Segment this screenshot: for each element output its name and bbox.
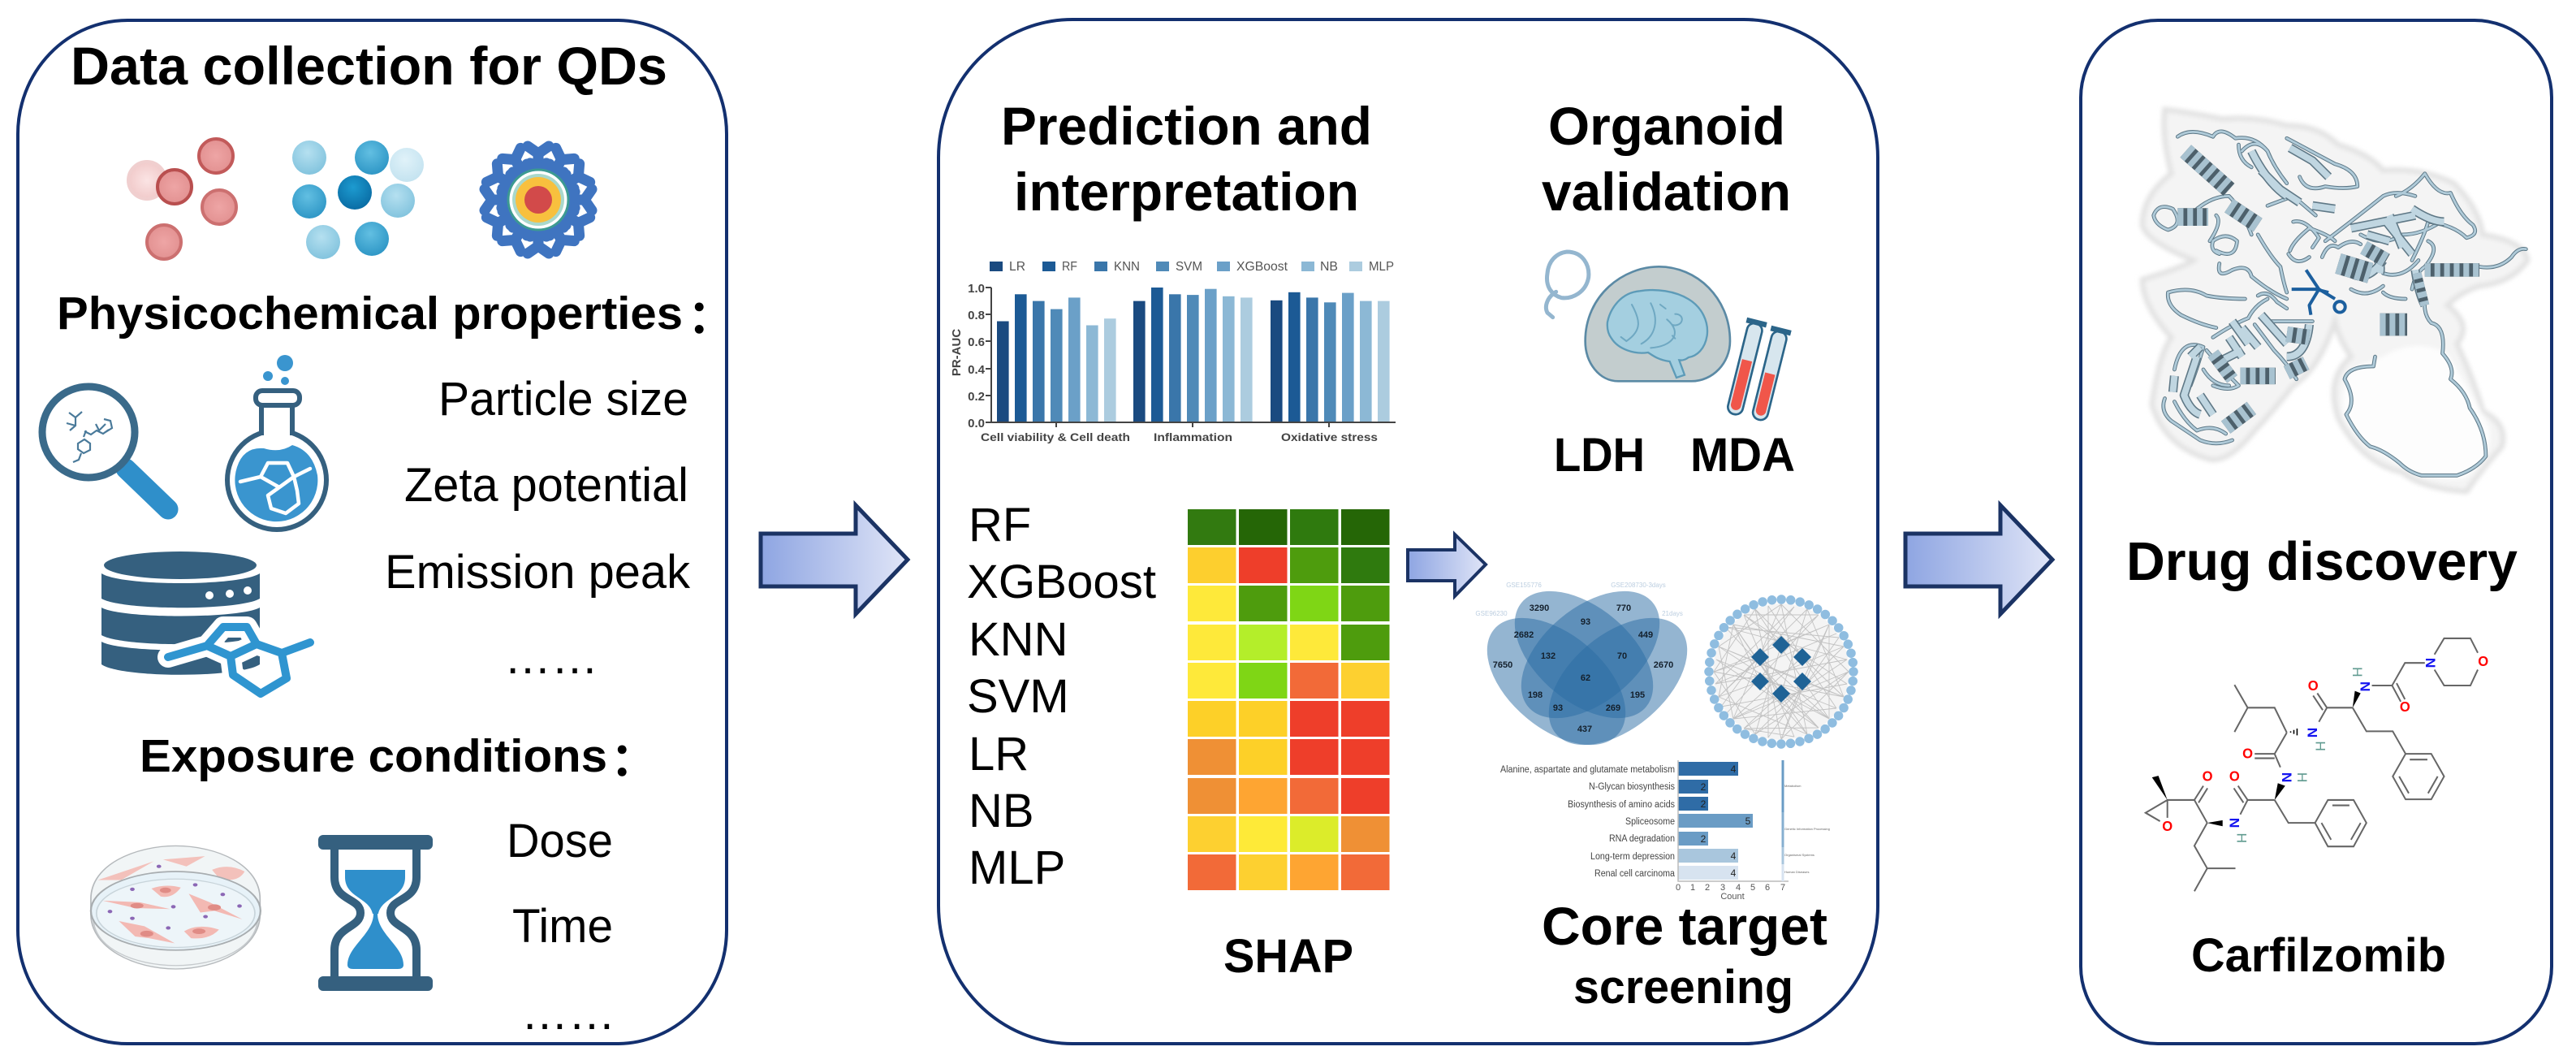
structure: carfilzomib molecule: O (2242, 746, 2253, 762)
legend: KNN (1114, 260, 1140, 274)
category strip: Organismal Systems (1784, 853, 1814, 857)
chart: four-set Venn diagram: 21days (1662, 610, 1683, 617)
bar values: 4 (1731, 867, 1737, 879)
icon: brain organoid and test tubes (1546, 252, 1792, 422)
structure: carfilzomib molecule: H (2312, 741, 2328, 751)
title: core target screening (1542, 896, 1827, 1014)
labels: LDH and MDA: MDA (1690, 429, 1795, 482)
legend: LR (1009, 260, 1025, 274)
pathway names: Biosynthesis of amino acids (1568, 800, 1675, 810)
structure: carfilzomib molecule: N (2423, 658, 2438, 668)
title: organoid validation: validation (1542, 162, 1791, 222)
arrow: screening to drug discovery (1905, 505, 2052, 614)
bar values: 2 (1701, 798, 1707, 810)
chart: four-set Venn diagram: 3290 (1530, 603, 1549, 613)
pathway names: Alanine, aspartate and glutamate metabolism (1500, 765, 1675, 775)
axis labels: Oxidative stress (1281, 430, 1378, 443)
chart: four-set Venn diagram: 93 (1553, 703, 1563, 713)
bar values: 2 (1701, 781, 1707, 793)
axis labels: 1.0 (968, 282, 985, 296)
structure: carfilzomib molecule: H (2234, 833, 2249, 843)
icon: blue quantum dots (292, 141, 424, 259)
structure: carfilzomib molecule: O (2478, 654, 2488, 669)
title: prediction and interpretation: Prediction and (1001, 96, 1372, 156)
list: machine learning models: LR (969, 728, 1029, 781)
structure: carfilzomib molecule: N (2279, 772, 2293, 782)
structure: carfilzomib molecule: H (2349, 667, 2364, 677)
icon: hourglass (318, 835, 433, 991)
chart: KEGG enrichment bar chart: 5 (1750, 883, 1755, 893)
chart: four-set Venn diagram: 93 (1581, 617, 1590, 627)
title: prediction and interpretation: interpretation (1014, 162, 1359, 222)
chart: four-set Venn diagram: 195 (1630, 690, 1645, 700)
pathway names: N-Glycan biosynthesis (1589, 782, 1675, 792)
category strip: Human Diseases (1784, 870, 1809, 874)
panel: data collection for QDs (18, 20, 734, 1044)
list: physicochemical properties: …… (504, 631, 598, 684)
bar values: 4 (1731, 763, 1737, 775)
chart: four-set Venn diagram: 62 (1581, 673, 1590, 683)
legend: MLP (1369, 260, 1394, 274)
chart: KEGG enrichment bar chart: 6 (1765, 883, 1770, 893)
pathway names: Renal cell carcinoma (1594, 869, 1676, 879)
chart: four-set Venn diagram (1464, 566, 1711, 770)
icon: database with molecule (101, 551, 310, 694)
legend: XGBoost (1236, 260, 1288, 274)
list: exposure conditions: …… (521, 987, 615, 1040)
icon: red quantum dots (128, 139, 236, 259)
chart: four-set Venn diagram: 2682 (1514, 630, 1534, 640)
title: drug discovery: Drug discovery (2126, 531, 2518, 592)
chart: KEGG enrichment bar chart: 0 (1676, 883, 1681, 893)
structure: carfilzomib molecule: O (2308, 677, 2319, 694)
count axis (1678, 760, 1789, 881)
chart: SHAP heatmap (1188, 509, 1390, 890)
chart: KEGG enrichment bar chart (1500, 760, 1830, 902)
axis labels: 0.0 (968, 417, 985, 430)
chart: four-set Venn diagram: 7650 (1493, 660, 1512, 670)
axis labels: 0.6 (968, 335, 985, 349)
chart: four-set Venn diagram: 437 (1577, 724, 1592, 734)
chart: four-set Venn diagram: 198 (1528, 690, 1543, 700)
structure: carfilzomib molecule: N (2305, 728, 2319, 737)
list: exposure conditions (507, 815, 615, 1040)
labels: LDH and MDA: LDH (1554, 429, 1645, 482)
bars: cell viability and cell death (997, 294, 1116, 422)
chart: four-set Venn diagram: 269 (1606, 703, 1620, 713)
chart: KEGG enrichment bar chart: 1 (1690, 883, 1695, 893)
title: prediction and interpretation (1001, 96, 1372, 222)
axis labels: 0.2 (968, 390, 985, 404)
icon: petri dish with cells (91, 846, 261, 969)
legend: SVM (1176, 260, 1202, 274)
bars (1678, 762, 1753, 880)
chart: KEGG enrichment bar chart: 4 (1736, 883, 1741, 893)
title: organoid validation (1542, 96, 1791, 222)
bars: inflammation (1133, 288, 1253, 422)
axis labels (950, 282, 1378, 443)
pathway names: Long-term depression (1590, 852, 1675, 862)
chart: four-set Venn diagram: 449 (1638, 630, 1653, 640)
list: machine learning models: NB (969, 785, 1034, 837)
chart: four-set Venn diagram: GSE96230 (1475, 610, 1508, 617)
bar values (1701, 763, 1751, 879)
icon: magnifying glass (42, 387, 168, 509)
arrow: SHAP to core target (1408, 534, 1486, 596)
structure: carfilzomib molecule (2146, 638, 2488, 891)
pathway names: Spliceosome (1625, 817, 1675, 827)
structure: carfilzomib molecule: N (2358, 681, 2372, 692)
list: physicochemical properties: Particle size (438, 373, 688, 426)
structure: carfilzomib molecule: O (2203, 768, 2213, 785)
list: physicochemical properties: Emission peak (385, 546, 691, 599)
chart: four-set Venn diagram: 132 (1541, 651, 1556, 661)
pathway names (1500, 765, 1676, 879)
chart: KEGG enrichment bar chart: 7 (1780, 883, 1785, 893)
axis labels: Cell viability & Cell death (981, 430, 1130, 443)
chart: protein interaction network (1709, 599, 1853, 744)
axis labels: 0.4 (968, 363, 986, 377)
bar values: 4 (1731, 850, 1737, 862)
list: machine learning models: XGBoost (967, 556, 1156, 608)
panel: drug discovery (2081, 20, 2552, 1044)
heading: exposure conditions: Exposure conditions (140, 730, 607, 782)
structure: carfilzomib molecule: O (2162, 819, 2173, 834)
heading: physicochemical properties: ： (688, 292, 734, 344)
title: data collection: Data collection for QDs (71, 36, 667, 96)
legend: RF (1062, 260, 1077, 274)
chart: four-set Venn diagram: 770 (1616, 603, 1631, 613)
chart: four-set Venn diagram: GSE155776 (1506, 582, 1542, 589)
structure: carfilzomib molecule: N (2226, 818, 2242, 828)
list: physicochemical properties (385, 373, 691, 684)
illustration: protein structure (2142, 110, 2527, 491)
axis labels: PR-AUC (950, 329, 964, 376)
list: exposure conditions: Time (512, 900, 613, 953)
list: machine learning models: RF (969, 499, 1031, 551)
chart: KEGG enrichment bar chart: 3 (1720, 883, 1725, 893)
bar values: 5 (1745, 815, 1751, 827)
icon: flask (227, 355, 326, 530)
category strip: Metabolism (1784, 784, 1801, 788)
structure: carfilzomib molecule: H (2294, 772, 2309, 782)
labels: LDH and MDA (1554, 429, 1795, 482)
category strip (1781, 760, 1830, 881)
list: machine learning models: MLP (969, 841, 1065, 894)
pathway names: RNA degradation (1609, 834, 1675, 844)
axes (986, 288, 1396, 427)
list: physicochemical properties: Zeta potential (404, 459, 688, 512)
legend: NB (1320, 260, 1338, 274)
chart: four-set Venn diagram: 2670 (1654, 660, 1673, 670)
title: core target screening: Core target (1542, 896, 1827, 956)
structure: carfilzomib molecule: O (2400, 699, 2410, 715)
panel: prediction, validation and screening (938, 19, 1878, 1044)
structure: carfilzomib molecule: O (2229, 768, 2240, 785)
bar values: 2 (1701, 833, 1707, 845)
axis labels: 0.8 (968, 309, 985, 322)
chart: PR-AUC bar chart (950, 260, 1396, 443)
list: machine learning models: KNN (969, 613, 1068, 666)
title: core target screening: screening (1573, 961, 1793, 1014)
chart: four-set Venn diagram: 70 (1617, 651, 1627, 661)
arrow: data to prediction (761, 505, 908, 614)
legend (990, 260, 1394, 274)
chart: KEGG enrichment bar chart: 2 (1705, 883, 1710, 893)
chart: four-set Venn diagram: GSE208730-3days (1611, 582, 1666, 589)
bars: oxidative stress (1271, 292, 1390, 422)
label: carfilzomib: Carfilzomib (2191, 929, 2446, 982)
axis labels: Inflammation (1154, 430, 1232, 443)
category strip: Genetic Information Processing (1784, 827, 1830, 831)
list: exposure conditions: Dose (507, 815, 613, 867)
label: SHAP: SHAP (1223, 930, 1353, 983)
list: machine learning models (967, 499, 1156, 894)
list: machine learning models: SVM (967, 670, 1069, 723)
icon: core-shell quantum dot with ligands (485, 146, 592, 253)
heading: physicochemical properties: Physicochemical properties (57, 288, 683, 340)
heading: exposure conditions: ： (611, 734, 657, 786)
chart: KEGG enrichment bar chart: Count (1720, 892, 1745, 902)
title: organoid validation: Organoid (1548, 96, 1785, 156)
